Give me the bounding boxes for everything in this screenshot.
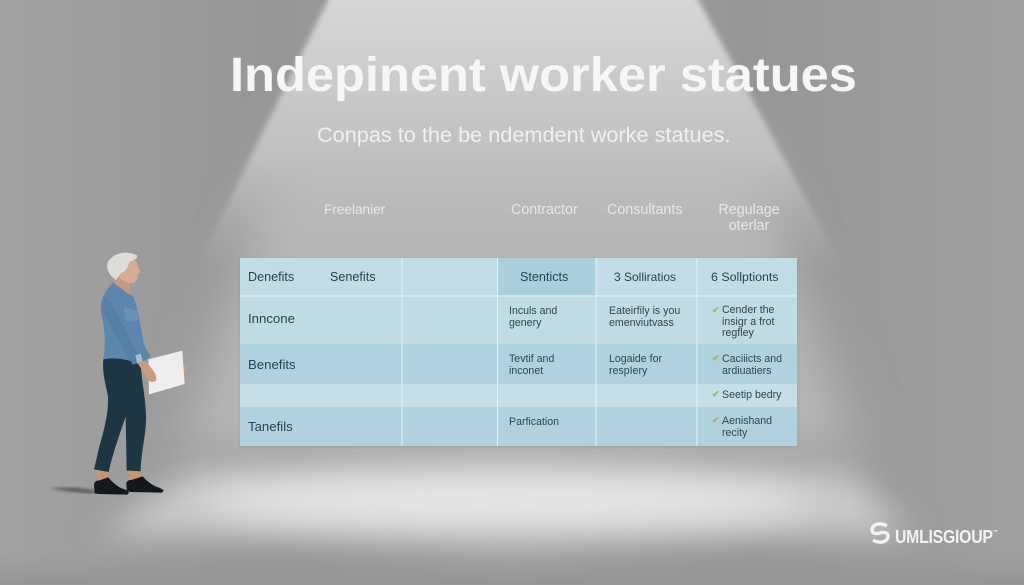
title: Indepinent worker statues [230, 49, 857, 102]
socks [97, 471, 108, 483]
contractor: income: Inculs and [509, 305, 557, 317]
check item 1: insigr a frot [722, 316, 774, 328]
table row backgrounds [240, 258, 797, 446]
logo [870, 522, 998, 547]
shirt [101, 282, 151, 364]
contractor: income: genery [509, 317, 541, 329]
check item 3: Seetip bedry [722, 389, 781, 401]
column headings [324, 202, 780, 234]
hair [107, 253, 137, 280]
cell: solutions 3: 3 Solliratios [614, 270, 676, 284]
contractor: benefits [509, 353, 554, 377]
label: tanefils: Tanefils [248, 419, 293, 434]
check item 4: ✔ [712, 415, 720, 425]
contractor: benefits: inconet [509, 365, 543, 377]
check item 1: Cender the [722, 304, 774, 316]
cell: stenticts: Stenticts [520, 270, 568, 284]
label: benefits: Benefits [248, 357, 296, 372]
heading: freelancer: Freelanier [324, 202, 385, 217]
cuff [135, 353, 143, 364]
consultants: income: Eateirfily is you [609, 305, 680, 317]
contractor column text [509, 305, 559, 428]
check item 1 [712, 304, 774, 339]
heading: contractor: Contractor [511, 202, 578, 218]
check item 4: Aenishand [722, 415, 772, 427]
cell: solutions 6: 6 Sollptionts [711, 270, 779, 284]
contractor: benefits: Tevtif and [509, 353, 554, 365]
label: denefits: Denefits [248, 270, 294, 284]
check item 1: regfley [722, 327, 754, 339]
contractor: tax: Parfication [509, 416, 559, 428]
trousers [94, 357, 146, 472]
consultants: income: emenviutvass [609, 317, 674, 329]
comparison table [240, 258, 797, 446]
consultants: benefits: Logaide for [609, 353, 662, 365]
consultants: income [609, 305, 680, 329]
person holding paper [52, 252, 188, 495]
check item 4: recity [722, 427, 747, 439]
header cells [520, 270, 779, 284]
left shoe [94, 477, 129, 495]
right shoe [126, 476, 164, 493]
heading: regular [718, 202, 780, 234]
check item 2: ardiuatiers [722, 365, 771, 377]
back hand [179, 365, 188, 374]
consultants: benefits: respIery [609, 365, 647, 377]
heading: regular: Regulage [718, 202, 780, 218]
check item 3: ✔ [712, 389, 720, 399]
chest pocket [123, 307, 139, 322]
heading: regular: oterlar [729, 218, 769, 234]
regular column checklist [712, 304, 782, 439]
paper [148, 351, 185, 394]
sleeve [103, 297, 141, 365]
check item 4 [712, 415, 772, 439]
label: senefits: Senefits [330, 270, 376, 284]
consultants column text [609, 305, 680, 377]
check item 2: Caciiicts and [722, 353, 782, 365]
check item 2: ✔ [712, 353, 720, 363]
label: income: Inncone [248, 311, 295, 326]
check item 1: ✔ [712, 305, 720, 315]
logo text: UMLISGIOUP™ [895, 527, 998, 547]
row labels [248, 270, 376, 434]
heading: consultants: Consultants [607, 202, 682, 218]
logo mark [870, 522, 890, 544]
check item 2 [712, 353, 782, 377]
consultants: benefits [609, 353, 662, 377]
neck [115, 277, 130, 295]
head [116, 257, 140, 283]
contractor: income [509, 305, 557, 329]
hand [137, 361, 156, 382]
subtitle: Conpas to the be ndemdent worke statues. [317, 122, 731, 147]
